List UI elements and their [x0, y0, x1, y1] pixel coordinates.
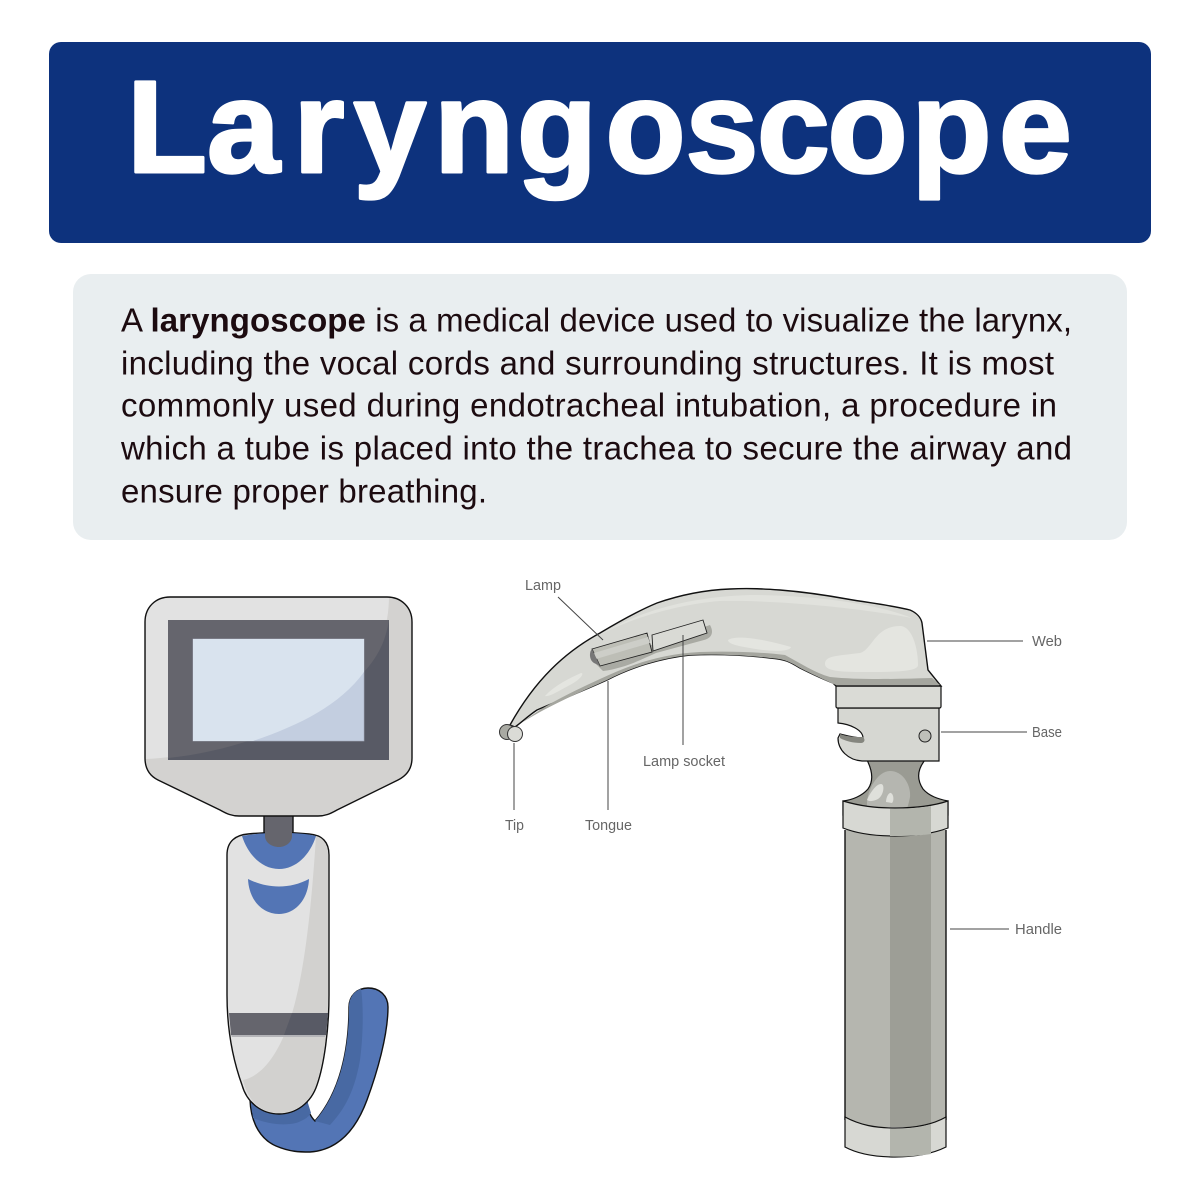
- label: Web: Web: [1032, 633, 1062, 650]
- title banner: [49, 42, 1151, 243]
- monitor: [145, 597, 412, 816]
- dark band: [229, 1013, 328, 1035]
- text block: definition: [120, 302, 1072, 510]
- text block: definition: including the vocal cords and surrounding structures. It is most: [121, 344, 1054, 382]
- handle body: [845, 830, 946, 1157]
- label: Web: [927, 633, 1062, 650]
- blade underside: [523, 652, 940, 722]
- labels and leader lines: [505, 577, 1062, 938]
- neck knob: [843, 760, 948, 815]
- tip: [500, 724, 522, 742]
- title: Laryngoscope: [127, 53, 1072, 200]
- illustration: Macintosh laryngoscope: [500, 589, 948, 1157]
- base plate: [836, 685, 941, 708]
- base: [836, 685, 941, 761]
- blade: [510, 589, 941, 727]
- neck front: [265, 830, 292, 847]
- text block: definition: which a tube is placed into the trachea to secure the airway and: [120, 430, 1072, 466]
- lower collar: [845, 1117, 946, 1157]
- screen frame: [168, 620, 389, 760]
- panel: definition text: [73, 274, 1127, 540]
- label: Lamp socket: Lamp socket: [643, 753, 726, 770]
- illustration: video laryngoscope: [145, 597, 412, 1152]
- screen: [193, 639, 364, 741]
- blue collar: [242, 833, 316, 869]
- neck: [264, 812, 293, 836]
- lamp socket: [590, 620, 712, 671]
- text block: definition: A laryngoscope is a medical device used to visualize the larynx,: [121, 302, 1072, 338]
- text block: definition: ensure proper breathing.: [121, 472, 487, 510]
- handle: [227, 830, 329, 1114]
- label: Lamp: [525, 577, 603, 640]
- label: Tip: [505, 743, 524, 834]
- base pin: [919, 730, 931, 742]
- lamp: [592, 633, 652, 666]
- label: Handle: [950, 921, 1062, 938]
- upper collar: [843, 801, 948, 836]
- label: Base: Base: [1032, 724, 1062, 741]
- blade highlights: [825, 626, 918, 672]
- label: Base: [941, 724, 1062, 741]
- label: Tip: Tip: [505, 817, 524, 834]
- blue grip: [248, 879, 309, 914]
- blue blade: [250, 988, 388, 1152]
- label: Handle: Handle: [1015, 921, 1062, 938]
- lamp shadow: [596, 625, 712, 671]
- text block: definition: commonly used during endotracheal intubation, a procedure in: [121, 386, 1057, 424]
- label: Lamp: Lamp: [525, 577, 561, 594]
- monitor highlight: [146, 598, 389, 759]
- handle shading: [243, 836, 328, 1113]
- label: Tongue: Tongue: [585, 817, 632, 834]
- label: Lamp socket: [643, 635, 726, 770]
